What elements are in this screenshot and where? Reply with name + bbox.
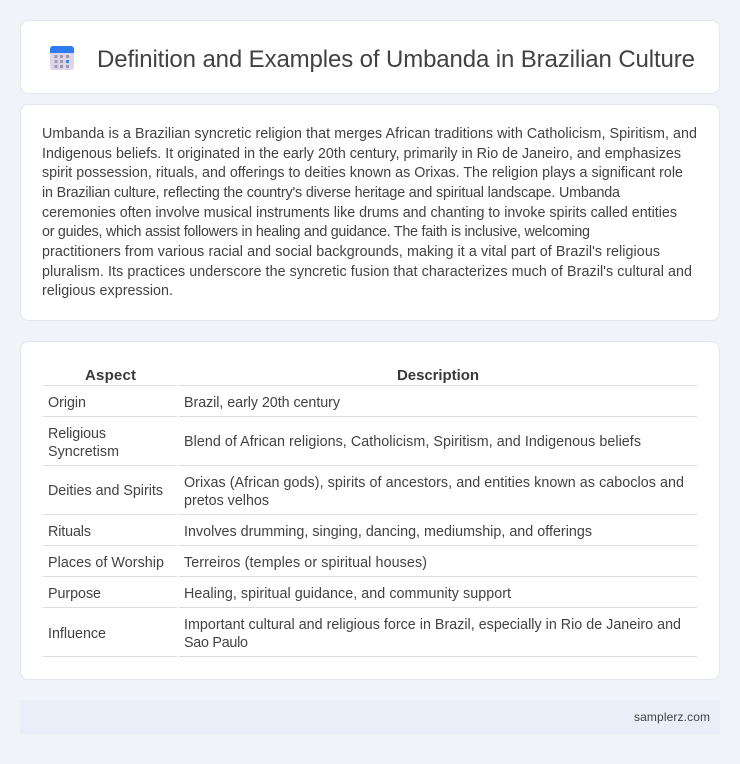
row: religious syncretism [43,426,697,466]
title: Definition and Examples of Umbanda in Brazilian Culture [97,46,695,73]
row: deities and spirits: Deities and Spirits [48,483,163,499]
panel: table [20,342,720,680]
row: deities and spirits [43,475,697,514]
row: deities and spirits: Orixas (African gods), spirits of ancestors, and entities known as caboclos and [184,475,684,491]
row: influence: Sao Paulo [184,635,248,651]
table header [43,367,697,386]
panel: header [20,20,720,94]
row: influence: Influence [48,626,106,642]
row: purpose: Healing, spiritual guidance, and community support [184,586,511,602]
table header: Description [397,367,479,384]
footer [20,700,720,734]
text block: summary paragraph: practitioners from various racial and social backgrounds, making it a vital part of Brazil's religious [42,244,660,260]
footer credit: samplerz.com [634,710,710,724]
row: influence: Important cultural and religious force in Brazil, especially in Rio de Janeiro and [184,617,681,633]
row: purpose: Purpose [48,586,101,602]
row: purpose [43,586,697,608]
text block: summary paragraph: religious expression. [42,283,173,299]
row: rituals [43,524,697,546]
text block: summary paragraph: or guides, which assist followers in healing and guidance. The faith is inclusive, welcoming [42,224,590,240]
row: origin [43,395,697,416]
row: places of worship [43,555,697,576]
row: origin: Brazil, early 20th century [184,395,341,411]
icon: calendar [50,46,74,70]
row: places of worship: Terreiros (temples or spiritual houses) [184,555,427,571]
row: rituals: Rituals [48,524,91,540]
text block: summary paragraph: spirit possession, rituals, and offerings to deities known as Orixas. The religion plays a significant role [42,165,683,181]
row: deities and spirits: pretos velhos [184,493,269,509]
text block: summary paragraph: Umbanda is a Brazilian syncretic religion that merges African traditions with Catholicism, Spiritism, and [42,126,697,142]
row: rituals: Involves drumming, singing, dancing, mediumship, and offerings [184,524,592,540]
text block: summary paragraph: pluralism. Its practices underscore the syncretic fusion that characterizes much of Brazil's cultural and [42,264,692,280]
text block: summary paragraph [42,126,697,299]
text block: summary paragraph: in Brazilian culture, reflecting the country's diverse heritage and spiritual landscape. Umbanda [42,185,620,201]
row: religious syncretism: Syncretism [48,444,119,460]
panel: summary [20,104,720,320]
text block: summary paragraph: ceremonies often involve musical instruments like drums and chanting to invoke spirits called entities [42,205,677,221]
row: influence [43,617,697,656]
table header: Aspect [85,367,136,384]
row: places of worship: Places of Worship [48,555,164,571]
row: religious syncretism: Blend of African religions, Catholicism, Spiritism, and Indigenous beliefs [184,434,641,450]
text block: summary paragraph: Indigenous beliefs. It originated in the early 20th century, primarily in Rio de Janeiro, and emphasizes [42,146,681,162]
row: religious syncretism: Religious [48,426,106,442]
row: origin: Origin [48,395,86,411]
